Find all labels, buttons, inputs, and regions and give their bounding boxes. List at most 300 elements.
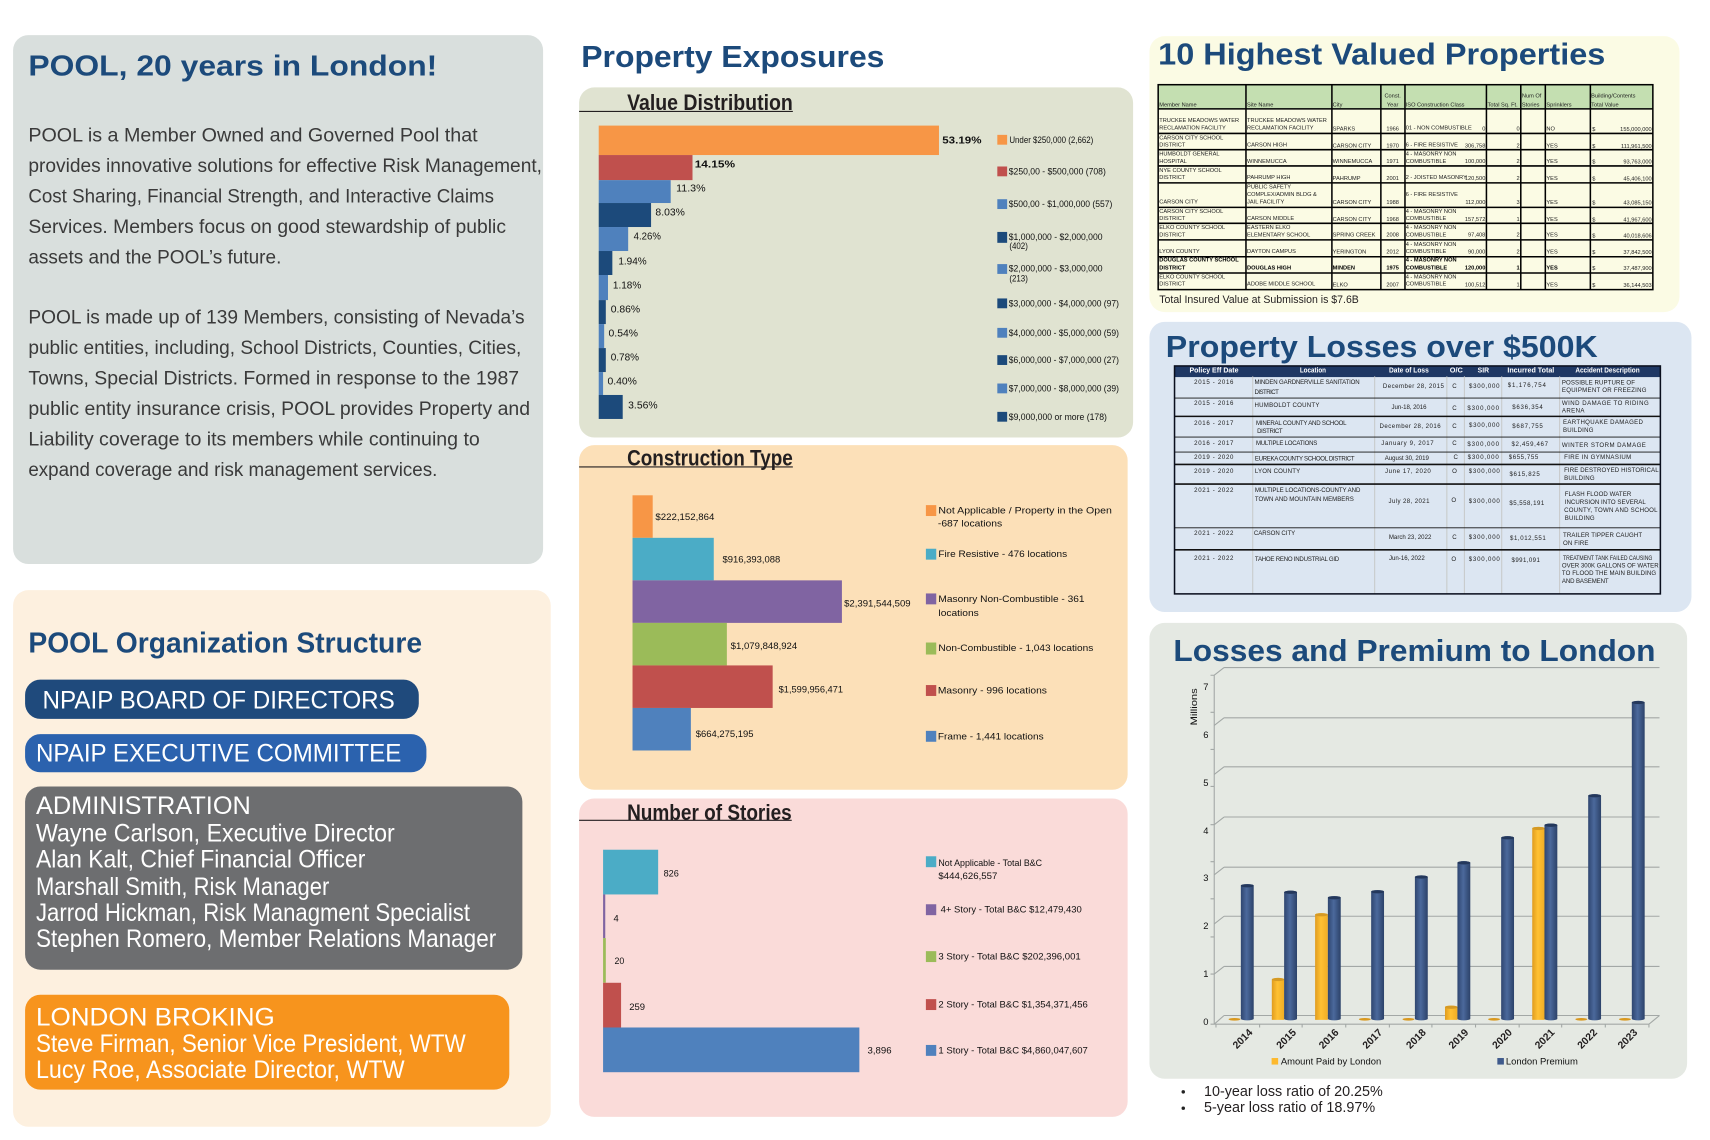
table: property losses: MINERAL COUNTY AND SCHOOL bbox=[1256, 420, 1347, 427]
legend: value distribution: $250,00 - $500,000 (708) bbox=[1009, 166, 1106, 176]
bar chart: number of stories: 3,896 bbox=[868, 1045, 892, 1055]
table: highest valued properties: WINNEMUCCA bbox=[1247, 159, 1287, 165]
table: highest valued properties: HOSPITAL bbox=[1159, 159, 1187, 165]
text block: member owned paragraph: provides innovative solutions for effective Risk Management, bbox=[28, 155, 542, 177]
table: highest valued properties: RECLAMATION FACILITY bbox=[1247, 126, 1314, 132]
table: property losses: LYON COUNTY bbox=[1255, 468, 1300, 475]
table: highest valued properties: DISTRICT bbox=[1159, 142, 1186, 148]
table: property losses: Jun-18, 2016 bbox=[1392, 404, 1427, 411]
legend: construction type: Not Applicable / Property in the Open bbox=[938, 506, 1112, 516]
table: property losses: O bbox=[1451, 556, 1456, 563]
bar chart: construction type: $2,391,544,509 bbox=[844, 598, 911, 608]
table: highest valued properties: 36,144,503 bbox=[1623, 283, 1652, 289]
box: administration: Jarrod Hickman, Risk Managment Specialist bbox=[36, 899, 470, 927]
panel: 10 highest valued properties bbox=[1149, 36, 1679, 312]
table: property losses: C bbox=[1452, 440, 1457, 447]
bar chart: number of stories: 259 bbox=[629, 1002, 645, 1012]
table: highest valued properties: MINDEN bbox=[1333, 266, 1355, 272]
table: property losses: EARTHQUAKE DAMAGED bbox=[1563, 419, 1644, 426]
bar chart: number of stories: 20 bbox=[615, 956, 624, 966]
text block: member owned paragraph: POOL is a Member Owned and Governed Pool that bbox=[28, 124, 478, 146]
table: highest valued properties: Total Value bbox=[1591, 103, 1619, 109]
table: highest valued properties: COMBUSTIBLE bbox=[1406, 249, 1447, 255]
table: highest valued properties: 1 bbox=[1517, 282, 1520, 288]
table: highest valued properties: CARSON CITY SCHOOL bbox=[1159, 209, 1223, 215]
table: highest valued properties: 43,085,150 bbox=[1623, 201, 1652, 207]
table: property losses: $300,000 bbox=[1469, 383, 1500, 390]
legend: value distribution: $4,000,000 - $5,000,000 (59) bbox=[1009, 328, 1119, 338]
table: property losses: 2015 - 2016 bbox=[1194, 379, 1234, 386]
y axis labels: Millions bbox=[1189, 688, 1199, 725]
table: property losses: FIRE DESTROYED HISTORICAL bbox=[1564, 467, 1659, 474]
table: highest valued properties: LYON COUNTY bbox=[1159, 249, 1200, 255]
table: property losses: 2015 - 2016 bbox=[1194, 400, 1234, 407]
table: highest valued properties: PAHRUMP HIGH bbox=[1247, 175, 1291, 181]
legend: value distribution: (213) bbox=[1009, 273, 1028, 283]
table: property losses: $300,000 bbox=[1469, 422, 1500, 429]
table: highest valued properties: DISTRICT bbox=[1159, 216, 1186, 222]
table: highest valued properties: COMBUSTIBLE bbox=[1406, 159, 1447, 165]
table: property losses: Location bbox=[1300, 367, 1326, 374]
box: executive committee: NPAIP EXECUTIVE COMMITTEE bbox=[36, 740, 401, 768]
table: property losses: CARSON CITY bbox=[1254, 530, 1295, 537]
box: administration: Wayne Carlson, Executive Director bbox=[36, 819, 395, 847]
panel: value distribution bbox=[579, 87, 1133, 437]
text block: loss ratios: 5-year loss ratio of 18.97% bbox=[1204, 1100, 1375, 1116]
table: highest valued properties: TRUCKEE MEADOWS WATER bbox=[1159, 118, 1239, 124]
table: highest valued properties: 1971 bbox=[1386, 159, 1399, 165]
text block: member owned paragraph: assets and the POOL’s future. bbox=[28, 247, 281, 269]
x axis year labels: 2018 bbox=[1405, 1027, 1429, 1052]
box: London broking: Steve Firman, Senior Vice President, WTW bbox=[36, 1030, 466, 1058]
table: highest valued properties: 100,000 bbox=[1465, 159, 1485, 165]
bar chart: construction type: $1,079,848,924 bbox=[731, 641, 797, 651]
heading: Number of Stories: Number of Stories bbox=[627, 800, 792, 825]
table: property losses: $300,000 bbox=[1467, 405, 1500, 412]
table: highest valued properties: $ bbox=[1592, 177, 1596, 183]
table: highest valued properties: 120,500 bbox=[1465, 176, 1485, 182]
table: highest valued properties: JAIL FACILITY bbox=[1247, 200, 1284, 206]
table: property losses: December 28, 2016 bbox=[1380, 423, 1441, 430]
table: property losses: $300,000 bbox=[1468, 454, 1499, 461]
table: property losses: Policy Eff Date bbox=[1189, 367, 1239, 374]
table: property losses: TOWN AND MOUNTAIN MEMBERS bbox=[1255, 496, 1354, 503]
table: highest valued properties: $ bbox=[1592, 250, 1596, 256]
bars: London premium bbox=[1241, 701, 1645, 1020]
heading: Property Exposures: Property Exposures bbox=[581, 40, 884, 74]
table: highest valued properties: COMBUSTIBLE bbox=[1406, 216, 1447, 222]
table: highest valued properties: 4 - MASONRY NON bbox=[1406, 242, 1456, 248]
x axis year labels: 2017 bbox=[1361, 1027, 1385, 1052]
box: administration: Stephen Romero, Member Relations Manager bbox=[36, 925, 496, 953]
table: highest valued properties: SPRING CREEK bbox=[1333, 233, 1376, 239]
table: property losses: MINDEN GARDNERVILLE SANITATION bbox=[1254, 379, 1360, 386]
table: property losses: $655,755 bbox=[1509, 454, 1539, 461]
table: highest valued properties: $ bbox=[1592, 217, 1596, 223]
table: property losses: AND BASEMENT bbox=[1562, 578, 1609, 585]
table: property losses: C bbox=[1452, 405, 1457, 412]
table: highest valued properties: 0 bbox=[1482, 126, 1485, 132]
table: highest valued properties: YES bbox=[1546, 266, 1558, 272]
table: highest valued properties: 2007 bbox=[1386, 282, 1399, 288]
panel: number of stories bbox=[579, 798, 1128, 1117]
table: property losses: ARENA bbox=[1562, 407, 1585, 414]
legend: construction type: locations bbox=[938, 608, 979, 618]
table: highest valued properties: ADOBE MIDDLE SCHOOL bbox=[1247, 282, 1315, 288]
panel: organization structure bbox=[13, 590, 551, 1127]
table: highest valued properties: 1 bbox=[1517, 266, 1520, 272]
heading: POOL, 20 years in London: POOL, 20 years in London! bbox=[28, 51, 437, 83]
table: highest valued properties: WINNEMUCCA bbox=[1333, 159, 1372, 165]
table: highest valued properties: CARSON CITY bbox=[1333, 217, 1372, 223]
table: property losses: 2021 - 2022 bbox=[1194, 530, 1234, 537]
table: highest valued properties: 41,967,600 bbox=[1623, 217, 1652, 223]
legend: construction type: Frame - 1,441 locations bbox=[938, 731, 1044, 741]
table: highest valued properties: TRUCKEE MEADOWS WATER bbox=[1247, 118, 1327, 124]
box: administration: Marshall Smith, Risk Manager bbox=[36, 873, 329, 901]
heading: Construction Type: Construction Type bbox=[627, 446, 793, 471]
table: highest valued properties: 100,512 bbox=[1465, 282, 1485, 288]
table: property losses: $300,000 bbox=[1467, 441, 1500, 448]
table: property losses: 2016 - 2017 bbox=[1194, 440, 1234, 447]
table: highest valued properties: CARSON HIGH bbox=[1247, 142, 1287, 148]
table: highest valued properties: 1970 bbox=[1386, 143, 1399, 149]
table: highest valued properties: COMBUSTIBLE bbox=[1406, 282, 1447, 288]
table: property losses: January 9, 2017 bbox=[1381, 440, 1434, 447]
legend: value distribution: (402) bbox=[1009, 241, 1028, 251]
table: highest valued properties: 306,758 bbox=[1465, 143, 1485, 149]
table: highest valued properties: PUBLIC SAFETY bbox=[1247, 185, 1291, 191]
table: highest valued properties: $ bbox=[1592, 160, 1596, 166]
table: highest valued properties: 1975 bbox=[1386, 266, 1399, 272]
bar chart: number of stories: 826 bbox=[664, 869, 679, 879]
table: highest valued properties: PAHRUMP bbox=[1333, 176, 1361, 182]
table: highest valued properties: YES bbox=[1546, 176, 1558, 182]
bar chart: value distribution: 4.26% bbox=[634, 231, 661, 242]
table: property losses: 2019 - 2020 bbox=[1194, 454, 1234, 461]
y axis labels: 1 bbox=[1203, 969, 1208, 979]
table: highest valued properties: YES bbox=[1546, 282, 1558, 288]
table: property losses: $1,012,551 bbox=[1510, 535, 1546, 542]
table: highest valued properties: 4 - MASONRY NON bbox=[1406, 225, 1456, 231]
table: property losses: MULTIPLE LOCATIONS-COUNTY AND bbox=[1255, 487, 1361, 494]
bar chart: value distribution: 1.18% bbox=[613, 280, 641, 291]
y axis labels: 6 bbox=[1203, 730, 1208, 740]
table: highest valued properties: YES bbox=[1546, 200, 1558, 206]
heading: 10 Highest Valued Properties: 10 Highest Valued Properties bbox=[1158, 38, 1605, 72]
table: property losses: C bbox=[1452, 423, 1457, 430]
heading: Losses and Premium to London: Losses and Premium to London bbox=[1173, 634, 1655, 668]
table: highest valued properties: 4 - MASONRY NON bbox=[1406, 258, 1457, 264]
legend: value distribution: $7,000,000 - $8,000,000 (39) bbox=[1009, 383, 1119, 393]
table: property losses: March 23, 2022 bbox=[1389, 534, 1432, 541]
table: highest valued properties: 37,487,900 bbox=[1623, 266, 1652, 272]
table: property losses: TAHOE RENO INDUSTRIAL GID bbox=[1255, 556, 1340, 563]
note: total insured value: Total Insured Value at Submission is $7.6B bbox=[1159, 294, 1359, 306]
panel: losses and premium to London bbox=[1149, 623, 1687, 1079]
x axis year labels bbox=[1231, 1027, 1640, 1052]
table: property losses: Incurred Total bbox=[1507, 367, 1554, 374]
legend: value distribution bbox=[997, 135, 1119, 422]
table: highest valued properties bbox=[1158, 85, 1653, 290]
table: property losses: August 30, 2019 bbox=[1385, 455, 1430, 462]
table: property losses: COUNTY, TOWN AND SCHOOL bbox=[1564, 507, 1658, 514]
table: property losses: FIRE IN GYMNASIUM bbox=[1564, 454, 1631, 461]
table: highest valued properties: 40,018,606 bbox=[1623, 233, 1652, 239]
table: property losses: TO FLOOD THE MAIN BUILDING bbox=[1562, 570, 1656, 577]
x axis year labels: 2021 bbox=[1533, 1027, 1558, 1052]
table: highest valued properties: 6 - FIRE RESISTIVE bbox=[1406, 142, 1458, 148]
table: highest valued properties: Member Name bbox=[1159, 103, 1197, 109]
heading: POOL Organization Structure: POOL Organization Structure bbox=[28, 628, 422, 660]
y axis labels: 4 bbox=[1203, 826, 1208, 836]
heading: Property Losses over $500K: Property Losses over $500K bbox=[1166, 330, 1598, 364]
table: highest valued properties: 4 - MASONRY NON bbox=[1406, 209, 1456, 215]
table: property losses: FLASH FLOOD WATER bbox=[1565, 491, 1632, 498]
table: highest valued properties: 2012 bbox=[1386, 250, 1399, 256]
table: highest valued properties: YES bbox=[1546, 217, 1558, 223]
legend: number of stories bbox=[926, 856, 1088, 1056]
table: property losses: Jun-16, 2022 bbox=[1389, 555, 1425, 562]
table: highest valued properties: Building/Contents bbox=[1591, 94, 1636, 100]
table: highest valued properties: YES bbox=[1546, 233, 1558, 239]
table: property losses: WINTER STORM DAMAGE bbox=[1562, 442, 1646, 449]
chart legend: London Premium bbox=[1506, 1056, 1578, 1066]
box: London broking bbox=[25, 995, 509, 1090]
table: highest valued properties: $ bbox=[1592, 201, 1596, 207]
x axis year labels: 2015 bbox=[1275, 1027, 1299, 1052]
table: highest valued properties: City bbox=[1333, 103, 1343, 109]
bar chart: value distribution: 1.94% bbox=[618, 256, 647, 267]
table: highest valued properties: 45,406,100 bbox=[1623, 177, 1652, 183]
table: highest valued properties: 1968 bbox=[1386, 217, 1399, 223]
table: highest valued properties: COMBUSTIBLE bbox=[1406, 266, 1447, 272]
table: highest valued properties: 2 bbox=[1517, 159, 1520, 165]
table: highest valued properties: $ bbox=[1592, 233, 1596, 239]
table: highest valued properties: $ bbox=[1592, 266, 1596, 272]
table: highest valued properties: 112,000 bbox=[1465, 200, 1485, 206]
text block: loss ratios bbox=[1182, 1084, 1383, 1116]
table: highest valued properties: YES bbox=[1546, 143, 1558, 149]
table: highest valued properties: ELKO bbox=[1333, 282, 1348, 288]
bar chart: construction type bbox=[633, 495, 911, 750]
table: property losses: ON FIRE bbox=[1563, 540, 1589, 547]
bar chart: value distribution: 0.40% bbox=[607, 376, 637, 387]
table: highest valued properties: 2 bbox=[1517, 250, 1520, 256]
table: property losses: BUILDING bbox=[1563, 427, 1594, 434]
legend: number of stories: Not Applicable - Total B&C bbox=[938, 858, 1042, 868]
box: London broking: LONDON BROKING bbox=[36, 1004, 275, 1032]
table: property losses: BUILDING bbox=[1565, 515, 1595, 522]
table: highest valued properties: Year bbox=[1387, 103, 1398, 109]
table: highest valued properties: 97,408 bbox=[1468, 233, 1485, 239]
table: highest valued properties: 01 - NON COMBUSTIBLE bbox=[1406, 126, 1472, 132]
table: highest valued properties: 2008 bbox=[1386, 233, 1399, 239]
table: property losses: 2021 - 2022 bbox=[1194, 555, 1234, 562]
table: highest valued properties: Sprinklers bbox=[1546, 103, 1572, 109]
bar chart: construction type: $664,275,195 bbox=[696, 729, 754, 739]
table: highest valued properties: DISTRICT bbox=[1159, 282, 1186, 288]
table: highest valued properties: 2 bbox=[1517, 143, 1520, 149]
table: highest valued properties: 0 bbox=[1517, 126, 1520, 132]
legend: number of stories: $444,626,557 bbox=[938, 871, 997, 881]
box: London broking: Lucy Roe, Associate Director, WTW bbox=[36, 1056, 405, 1084]
table: highest valued properties: DOUGLAS HIGH bbox=[1247, 266, 1291, 272]
x axis year labels: 2019 bbox=[1447, 1027, 1471, 1052]
table: highest valued properties: $ bbox=[1592, 144, 1596, 150]
text block: membership paragraph: public entity insurance crisis, POOL provides Property and bbox=[28, 398, 530, 420]
table: property losses: MULTIPLE LOCATIONS bbox=[1256, 440, 1317, 447]
table: highest valued properties: $ bbox=[1592, 283, 1596, 289]
bar chart: value distribution: 11.3% bbox=[676, 183, 706, 194]
table: highest valued properties: RECLAMATION FACILITY bbox=[1159, 126, 1226, 132]
table: highest valued properties: YERINGTON bbox=[1333, 250, 1366, 256]
table: property losses: $991,091 bbox=[1512, 557, 1540, 564]
y axis labels: 2 bbox=[1203, 921, 1208, 931]
table: property losses: EQUIPMENT OR FREEZING bbox=[1562, 387, 1647, 394]
bar chart: number of stories: 4 bbox=[613, 913, 619, 923]
legend: construction type: Masonry - 996 locations bbox=[938, 686, 1047, 696]
text block: membership paragraph: Towns, Special Districts. Formed in response to the 1987 bbox=[28, 368, 519, 390]
table: highest valued properties: $ bbox=[1592, 127, 1596, 133]
panel: about POOL bbox=[13, 35, 543, 564]
box: administration: Alan Kalt, Chief Financial Officer bbox=[36, 846, 365, 874]
table: highest valued properties: 2 bbox=[1517, 233, 1520, 239]
table: highest valued properties: 155,000,000 bbox=[1620, 127, 1652, 133]
legend: value distribution: $1,000,000 - $2,000,000 bbox=[1009, 232, 1103, 242]
text block: membership paragraph: POOL is made up of 139 Members, consisting of Nevada’s bbox=[28, 307, 525, 329]
table: highest valued properties: 111,961,500 bbox=[1621, 144, 1652, 150]
text block: loss ratios: 10-year loss ratio of 20.25% bbox=[1204, 1084, 1383, 1100]
legend: construction type: Fire Resistive - 476 locations bbox=[938, 549, 1067, 559]
y axis labels: 3 bbox=[1203, 873, 1208, 883]
x axis year labels: 2022 bbox=[1576, 1027, 1600, 1052]
legend: construction type: Non-Combustible - 1,043 locations bbox=[938, 643, 1094, 653]
table: property losses: 2021 - 2022 bbox=[1194, 487, 1234, 494]
table: highest valued properties: DAYTON CAMPUS bbox=[1247, 249, 1296, 255]
text block: member owned paragraph bbox=[28, 124, 542, 269]
panel: construction type bbox=[579, 445, 1128, 790]
heading: Value Distribution: Value Distribution bbox=[627, 90, 793, 115]
table: highest valued properties: DISTRICT bbox=[1159, 233, 1186, 239]
box: administration bbox=[25, 786, 522, 970]
table: property losses: $2,459,467 bbox=[1511, 441, 1549, 448]
chart legend: Amount Paid by London bbox=[1281, 1056, 1381, 1066]
table: highest valued properties: 4 - MASONRY NON bbox=[1406, 275, 1456, 281]
bar chart: value distribution: 14.15% bbox=[695, 159, 736, 170]
table: property losses: $300,000 bbox=[1469, 556, 1500, 563]
table: property losses: TREATMENT TANK FAILED CAUSING bbox=[1563, 555, 1653, 562]
bar chart: construction type: $1,599,956,471 bbox=[779, 684, 843, 694]
legend: construction type: Masonry Non-Combustible - 361 bbox=[938, 594, 1085, 604]
table: highest valued properties: ELKO COUNTY SCHOOL bbox=[1159, 275, 1225, 281]
table: highest valued properties: 1988 bbox=[1386, 200, 1399, 206]
table: highest valued properties: DISTRICT bbox=[1159, 266, 1186, 272]
table: highest valued properties: Total Sq. Ft. bbox=[1488, 103, 1518, 109]
text block: member owned paragraph: Cost Sharing, Financial Strength, and Interactive Claims bbox=[28, 185, 494, 207]
table: highest valued properties: CARSON CITY SCHOOL bbox=[1159, 135, 1223, 141]
table: highest valued properties: DOUGLAS COUNTY SCHOOL bbox=[1159, 258, 1239, 264]
table: highest valued properties: YES bbox=[1546, 250, 1558, 256]
table: property losses bbox=[1175, 366, 1660, 594]
legend: number of stories: 4+ Story - Total B&C $12,479,430 bbox=[941, 905, 1082, 915]
table: highest valued properties: ELEMENTARY SCHOOL bbox=[1247, 233, 1310, 239]
table: highest valued properties: EASTERN ELKO bbox=[1247, 225, 1291, 231]
table: property losses: December 28, 2015 bbox=[1383, 383, 1445, 390]
table: highest valued properties: YES bbox=[1546, 159, 1558, 165]
box: administration: ADMINISTRATION bbox=[36, 792, 251, 820]
table: property losses: June 17, 2020 bbox=[1385, 468, 1431, 475]
box: board of directors bbox=[25, 680, 419, 719]
text block: member owned paragraph: Services. Members focus on good stewardship of public bbox=[28, 216, 506, 238]
table: property losses: $687,755 bbox=[1512, 423, 1543, 430]
table: highest valued properties: 3 bbox=[1517, 200, 1520, 206]
table: property losses: C bbox=[1453, 454, 1458, 461]
x axis year labels: 2020 bbox=[1491, 1027, 1515, 1052]
text block: membership paragraph: public entities, including, School Districts, Counties, Cities, bbox=[28, 337, 521, 359]
table: highest valued properties: SPARKS bbox=[1333, 126, 1355, 132]
table: property losses: OVER 300K GALLONS OF WATER bbox=[1562, 563, 1659, 570]
table: highest valued properties: 90,000 bbox=[1468, 250, 1485, 256]
chart legend bbox=[1272, 1056, 1578, 1066]
table: highest valued properties: Const. bbox=[1384, 94, 1401, 100]
legend: value distribution: $9,000,000 or more (178) bbox=[1009, 412, 1107, 422]
y axis labels: 7 bbox=[1203, 682, 1208, 692]
legend: number of stories: 1 Story - Total B&C $4,860,047,607 bbox=[938, 1045, 1088, 1055]
table: property losses: C bbox=[1452, 383, 1457, 390]
legend: construction type bbox=[926, 505, 1112, 742]
table: property losses: $1,176,754 bbox=[1508, 382, 1546, 389]
bar chart: value distribution: 0.78% bbox=[611, 352, 639, 363]
table: highest valued properties: CARSON MIDDLE bbox=[1247, 216, 1294, 222]
table: property losses: $5,558,191 bbox=[1509, 500, 1545, 507]
table: property losses: $615,825 bbox=[1509, 471, 1540, 478]
table: property losses: DISTRICT bbox=[1254, 389, 1279, 396]
table: property losses: SIR bbox=[1478, 367, 1489, 374]
legend: construction type: -687 locations bbox=[938, 519, 1003, 529]
table: highest valued properties: HUMBOLDT GENERAL bbox=[1159, 151, 1220, 157]
y axis labels: 0 bbox=[1203, 1017, 1208, 1027]
table: highest valued properties: DISTRICT bbox=[1159, 175, 1186, 181]
table: property losses: BUILDING bbox=[1564, 475, 1595, 482]
table: highest valued properties: NYE COUNTY SCHOOL bbox=[1159, 168, 1222, 174]
chart axes and gridlines bbox=[1211, 668, 1660, 1027]
table: property losses: POSSIBLE RUPTURE OF bbox=[1562, 379, 1635, 386]
bars: amount paid by London bbox=[1229, 827, 1631, 1021]
box: board of directors: NPAIP BOARD OF DIRECTORS bbox=[43, 686, 395, 714]
table: highest valued properties: 2 - JOISTED MASONRY bbox=[1406, 175, 1467, 181]
table: property losses: TRAILER TIPPER CAUGHT bbox=[1563, 532, 1642, 539]
legend: value distribution: $6,000,000 - $7,000,000 (27) bbox=[1009, 355, 1119, 365]
table: highest valued properties: 1966 bbox=[1386, 126, 1399, 132]
bar chart: value distribution: 3.56% bbox=[628, 400, 658, 411]
table: property losses: WIND DAMAGE TO RIDING bbox=[1562, 400, 1649, 407]
table: highest valued properties: CARSON CITY bbox=[1159, 200, 1198, 206]
table: property losses: $300,000 bbox=[1469, 534, 1500, 541]
table: property losses: HUMBOLDT COUNTY bbox=[1254, 402, 1319, 409]
table: highest valued properties: 157,572 bbox=[1465, 217, 1485, 223]
bar chart: value distribution: 53.19% bbox=[942, 135, 982, 146]
table: property losses: O bbox=[1451, 497, 1456, 504]
bar chart: construction type: $222,152,864 bbox=[655, 512, 714, 522]
table: highest valued properties: CARSON CITY bbox=[1333, 143, 1372, 149]
legend: value distribution: $3,000,000 - $4,000,000 (97) bbox=[1009, 298, 1119, 308]
table: property losses: Date of Loss bbox=[1389, 367, 1429, 374]
table: highest valued properties: 2001 bbox=[1386, 176, 1399, 182]
table: property losses: O bbox=[1452, 468, 1457, 475]
text block: membership paragraph: Liability coverage to its members while continuing to bbox=[28, 429, 480, 451]
table: highest valued properties: COMPLEX/ADMIN BLDG & bbox=[1247, 192, 1317, 198]
